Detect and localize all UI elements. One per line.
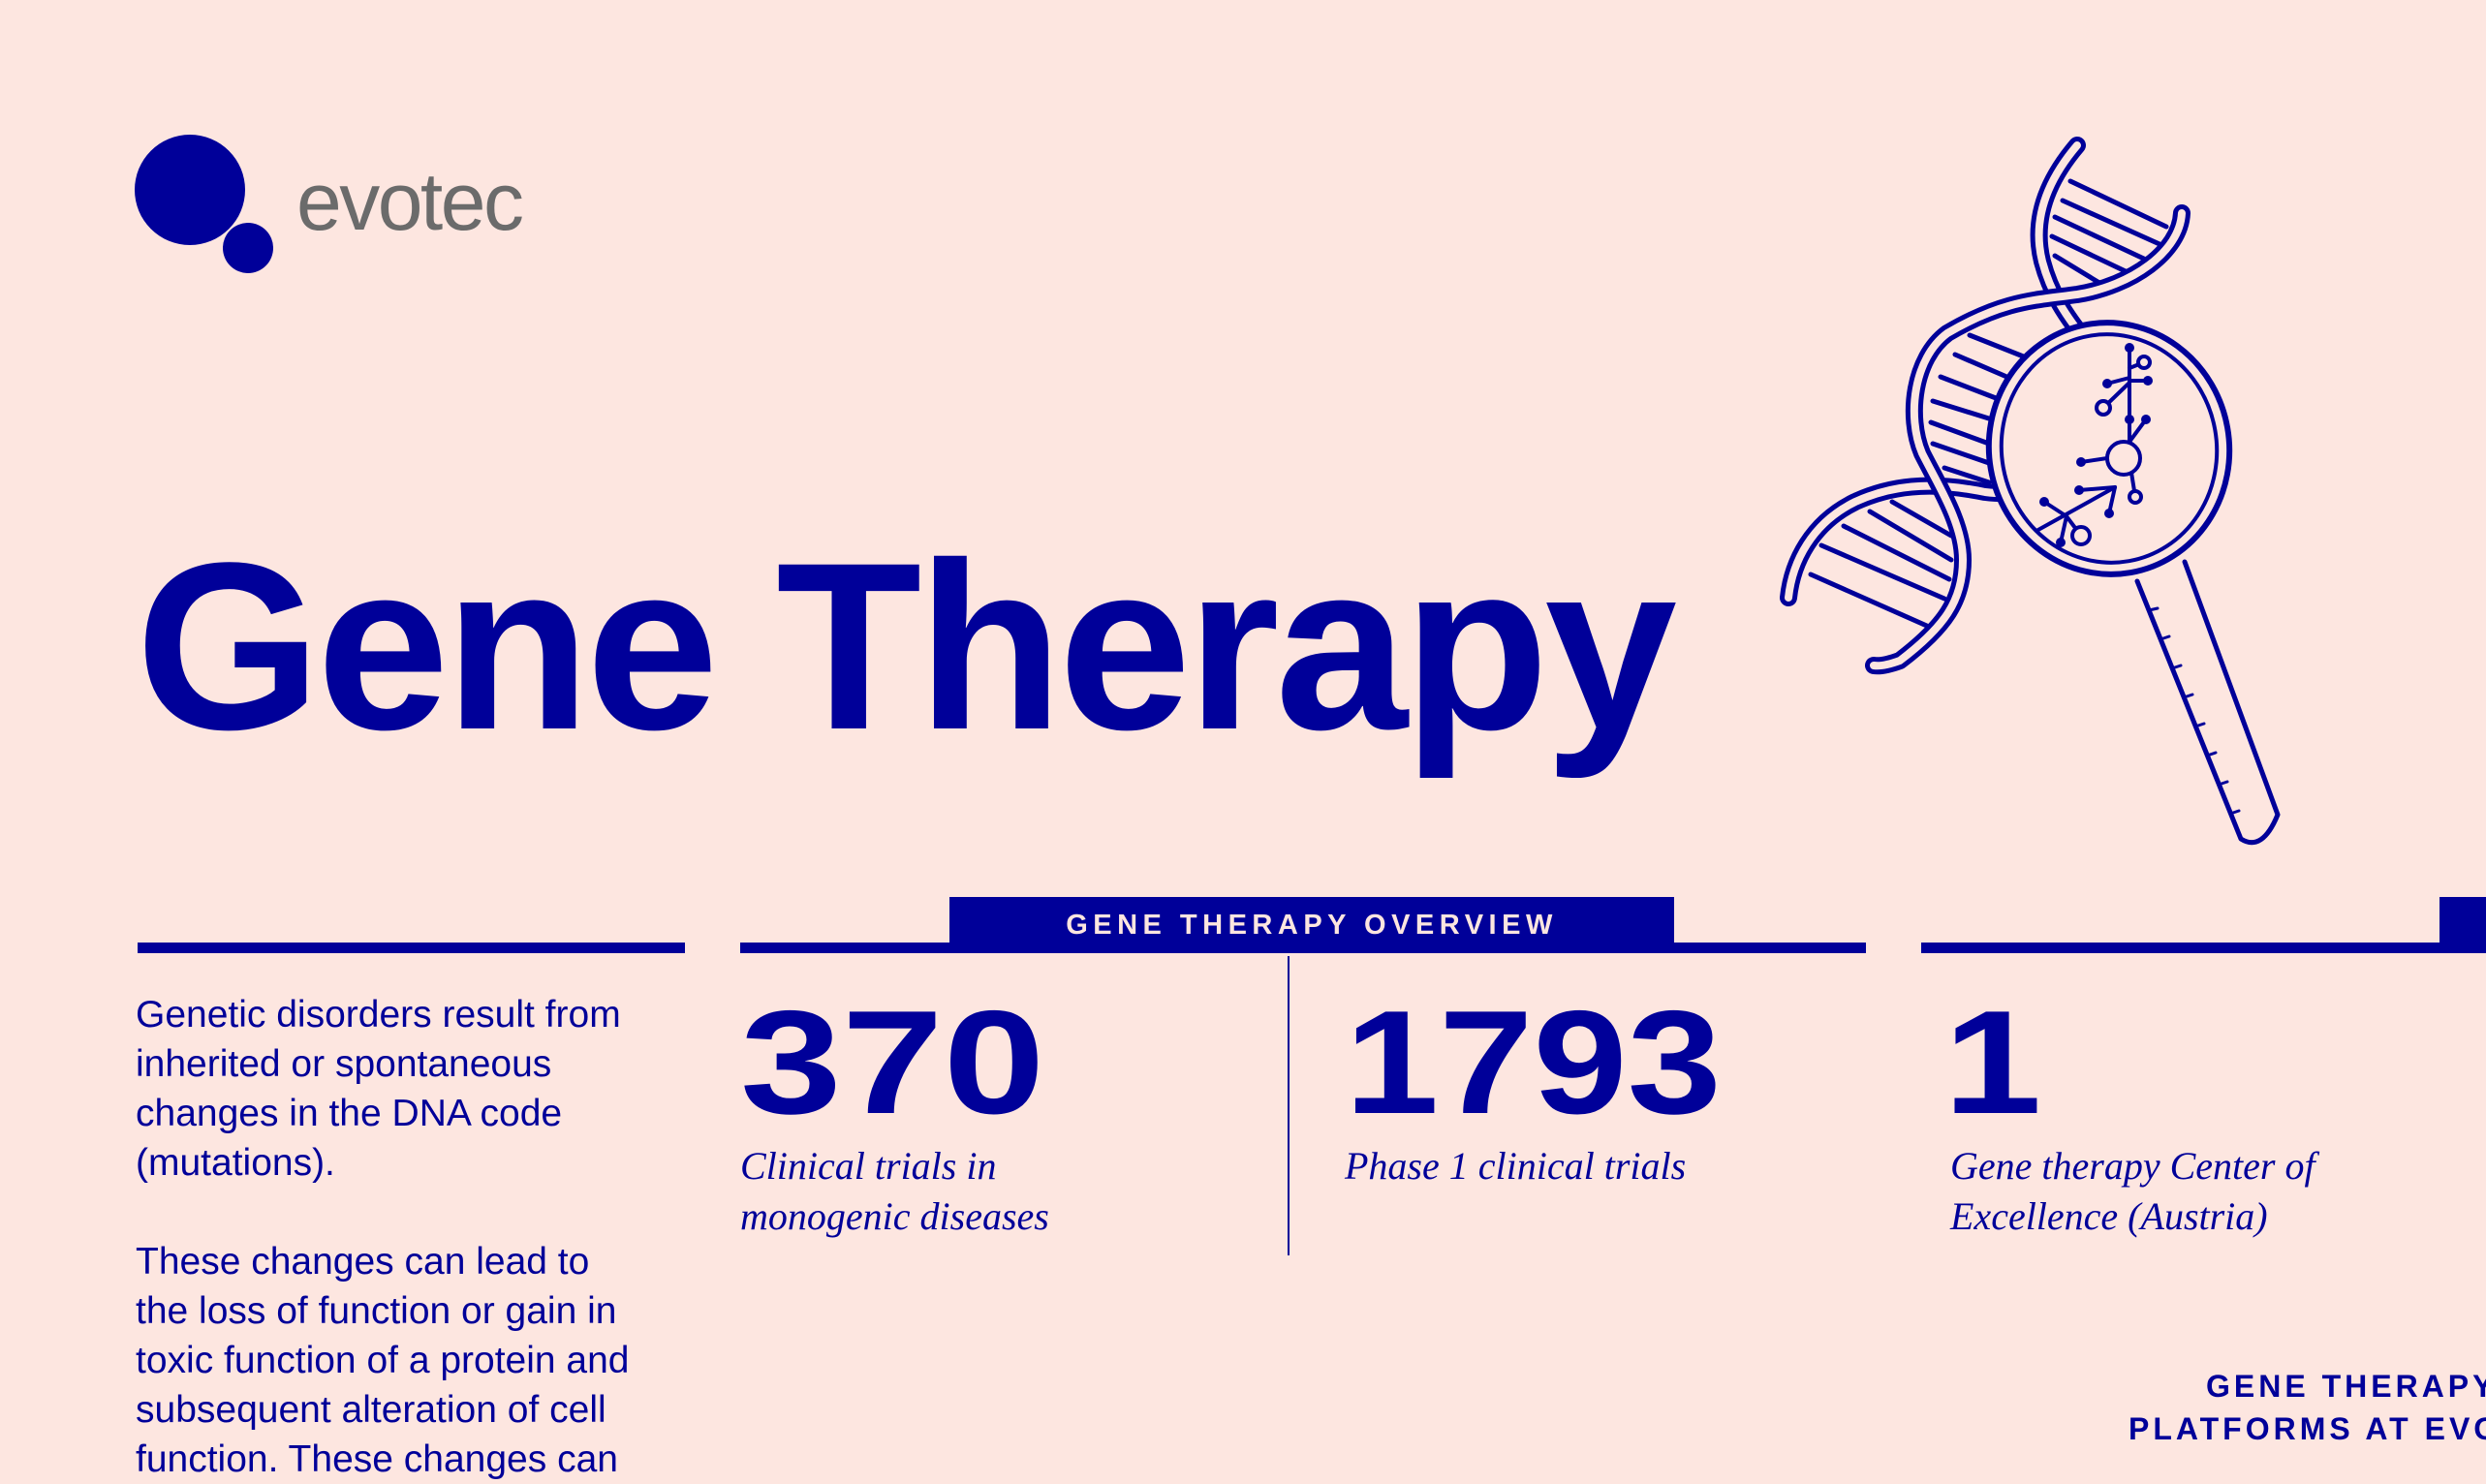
platforms heading	[2129, 1369, 2486, 1446]
magnifier handle	[2137, 562, 2278, 843]
caption 1793: Phase 1 clinical trials	[1345, 1144, 1686, 1188]
number 370: 370	[740, 980, 1044, 1145]
intro text: the loss of function or gain in	[136, 1290, 616, 1332]
caption 1: Gene therapy Center of	[1950, 1144, 2315, 1188]
intro text: function. These changes can	[136, 1438, 618, 1480]
title: Gene Therapy	[136, 513, 1673, 780]
strands	[2039, 145, 2093, 349]
rungs	[1811, 181, 2166, 627]
stat: 370	[740, 980, 1049, 1238]
number 1: 1	[1943, 980, 2041, 1145]
stat: 1793	[1345, 980, 1722, 1188]
right header block	[2439, 897, 2486, 953]
intro text: Genetic disorders result from	[136, 994, 621, 1036]
right rule	[1921, 943, 2486, 953]
overview header bar	[949, 897, 1674, 953]
logo mark	[135, 135, 273, 273]
left rule	[138, 943, 685, 953]
intro text: These changes can lead to	[136, 1241, 589, 1283]
magnifier lens	[1969, 303, 2250, 594]
intro text	[136, 994, 630, 1480]
stat: 1	[1943, 980, 2319, 1238]
logo	[135, 135, 522, 273]
caption 1	[1949, 1144, 2319, 1238]
intro text: subsequent alteration of cell	[136, 1389, 606, 1431]
overview header bar: GENE THERAPY OVERVIEW	[1066, 910, 1558, 941]
number 1793: 1793	[1345, 980, 1722, 1145]
caption 370: monogenic diseases	[740, 1194, 1049, 1238]
intro text: changes in the DNA code	[136, 1093, 562, 1134]
intro text: toxic function of a protein and	[136, 1340, 630, 1381]
middle rule	[740, 943, 1866, 953]
caption 1: Excellence (Austria)	[1950, 1194, 2268, 1238]
divider	[1288, 956, 1290, 1255]
intro text: (mutations).	[136, 1142, 335, 1184]
intro text: inherited or spontaneous	[136, 1043, 551, 1085]
caption 370: Clinical trials in	[740, 1144, 996, 1188]
logo wordmark: evotec	[296, 156, 521, 247]
molecule	[2036, 348, 2150, 544]
caption 370	[740, 1144, 1049, 1238]
